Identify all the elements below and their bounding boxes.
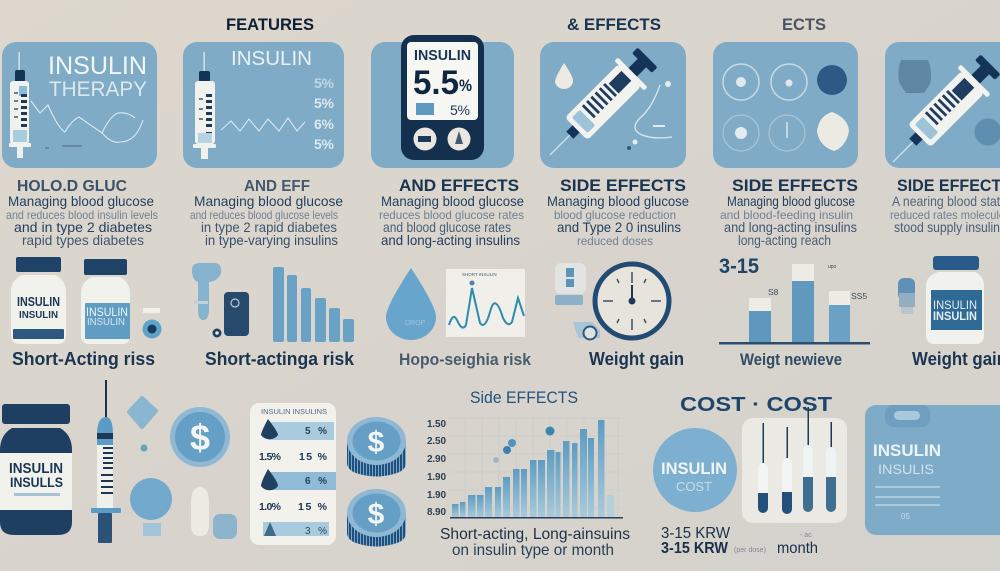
- chart: line card: [446, 269, 525, 337]
- bar: middle: [792, 264, 814, 342]
- icon: dollar coin stack top: [347, 417, 406, 476]
- icon: dollar coin stack top: $: [368, 426, 385, 459]
- text block: column 3: Managing blood glucose: [381, 193, 524, 209]
- text: bottle sublabel: INSULIN: [87, 317, 125, 328]
- text: drop label: DROP: [405, 320, 426, 327]
- axis labels: 2.90: [427, 454, 446, 465]
- icon: dollar coin stack bottom: [347, 489, 406, 546]
- line: wave: [221, 118, 305, 131]
- vial 3: [803, 407, 813, 512]
- label: short-acting risk: Short-actinga risk: [205, 349, 355, 369]
- icon: vertical syringe: [9, 52, 31, 158]
- axis labels: 8.90: [427, 507, 446, 518]
- text: bottle label: INSULIN: [9, 460, 63, 477]
- text block: column 2: Managing blood glucose: [194, 193, 343, 209]
- row: values one: [259, 451, 328, 463]
- text: cost range: (per dose): [734, 547, 766, 554]
- heading: and effects: & EFFECTS: [567, 15, 661, 34]
- row: band two: 6 %: [305, 476, 327, 487]
- text block: column 1: and in type 2 diabetes: [14, 219, 152, 235]
- markers: [493, 426, 554, 463]
- heading: features: FEATURES: [226, 15, 314, 34]
- icon: glucose meter: [401, 35, 484, 160]
- chart: monthly bars: [427, 418, 623, 518]
- panel: syringe with droplet: [535, 42, 686, 170]
- row: band two: [261, 469, 336, 490]
- icon: dollar coin large: [170, 407, 230, 467]
- text: bar annotations: upo: [828, 264, 837, 270]
- chart: weight bars: [719, 255, 870, 344]
- row: band three: [263, 522, 329, 537]
- icon: dark monitor: [212, 292, 249, 338]
- text block: column 2: and reduces blood glucose levels: [190, 208, 338, 222]
- icon: white pill device: [191, 487, 237, 539]
- icon: white patch: [817, 112, 849, 151]
- text block: column 1: rapid types diabetes: [22, 232, 144, 248]
- row: values two: 1.0%: [259, 501, 282, 513]
- line: glucose curve: [31, 101, 143, 142]
- icon: angled syringe: [535, 43, 662, 170]
- text: bottle label: INSULIN: [86, 305, 128, 319]
- text: bar annotations: [768, 264, 867, 301]
- caption: chart: [440, 526, 630, 559]
- icon: blue insulin bottle: [81, 259, 130, 344]
- text block: column 5: SIDE EFFECTS: [732, 176, 858, 195]
- icon: clock: [595, 264, 669, 338]
- text: bottle label: INSULIN: [933, 298, 977, 312]
- title: insulin therapy: [48, 52, 147, 101]
- icon: dark badge: [817, 65, 847, 95]
- icon: blue medical badges: [129, 398, 172, 536]
- marks: small dots: [627, 81, 671, 150]
- icon: droplet: [555, 63, 573, 89]
- text: percentages: 5%: [314, 95, 335, 111]
- row: values one: 1.5%: [259, 451, 282, 463]
- text block: column 2: AND EFF: [244, 178, 310, 195]
- icon: house capsule: [555, 263, 586, 305]
- card: insulin table: [250, 403, 336, 545]
- text block: column 3: and long-acting insulins: [381, 232, 520, 248]
- icon: cart: [573, 322, 600, 340]
- text: cost range: 3-15 KRW: [661, 540, 729, 557]
- icon: flower badge: [974, 118, 1000, 146]
- icon: white insulin bottle: [11, 257, 66, 344]
- text: percentages: [314, 75, 335, 152]
- text block: column 2: in type 2 rapid diabetes: [201, 219, 337, 235]
- row: band one: 5 %: [305, 426, 327, 437]
- heading: side effects: Side EFFECTS: [470, 388, 578, 407]
- text block: column 3: and blood glucose rates: [383, 219, 511, 235]
- icon: pen device: [898, 278, 915, 314]
- text: bottle sublabel: INSULIN: [19, 310, 58, 321]
- badge: insulin cost: [653, 428, 737, 512]
- icon: vertical syringe: [193, 52, 216, 159]
- axis labels: 1.50: [427, 419, 446, 430]
- text: cost range: month: [777, 540, 818, 557]
- label: hypoglycemia risk: Hopo-seighia risk: [399, 350, 532, 369]
- caption: chart: Short-acting, Long-ainsuins: [440, 526, 630, 543]
- text block: column 4: Managing blood glucose: [547, 193, 689, 209]
- text: meter small reading: 5%: [450, 102, 470, 118]
- text: cost range: 3-15 KRW: [661, 525, 731, 542]
- text: bottle sublabel: INSULLS: [10, 474, 63, 490]
- text block: column 4: blood glucose reduction: [554, 208, 676, 222]
- marks: small panel specks: [45, 146, 82, 148]
- vial 2: [782, 427, 792, 514]
- icon: water drop: [386, 268, 436, 340]
- title: insulin: INSULIN: [231, 48, 312, 70]
- heading: faded effects: ECTS: [782, 15, 826, 34]
- text: meter label: INSULIN: [414, 47, 471, 64]
- panel: syringe with badges: [878, 42, 1000, 177]
- text block: column 2: [190, 178, 343, 248]
- row: band one: [261, 419, 334, 440]
- number: 3-15: 3-15: [719, 255, 759, 278]
- text block: column 1: and reduces blood insulin levels: [6, 208, 158, 222]
- caption: chart: on insulin type or month: [452, 542, 614, 559]
- text block: column 2: in type-varying insulins: [205, 232, 338, 248]
- card: insulin pouch: [865, 405, 1000, 535]
- heading: cost: COST · COST: [680, 394, 832, 416]
- chart: descending bars: [273, 267, 354, 342]
- panel: side effect circles: [713, 42, 858, 168]
- text block: column 5: [720, 176, 858, 248]
- icon: bulb device: [192, 263, 221, 320]
- text: percentages: 5%: [314, 136, 335, 152]
- panel: insulin percentages: [183, 42, 344, 168]
- label: short-acting: Short-Acting riss: [12, 349, 155, 369]
- text: cost range: - ac: [800, 532, 812, 539]
- icon: meter chip: [416, 103, 434, 115]
- icon: meter buttons: [414, 128, 470, 150]
- text: pouch footnote: 05: [901, 512, 910, 521]
- text block: column 4: SIDE EFFECTS: [560, 176, 686, 195]
- text block: column 6: [890, 176, 1000, 235]
- icon: dark badge: [898, 60, 931, 93]
- text block: column 3: [379, 176, 524, 248]
- vial 1: [758, 423, 768, 513]
- icon: large vertical syringe: [91, 380, 121, 543]
- text block: column 4: [547, 176, 689, 248]
- text block: column 5: long-acting reach: [738, 232, 831, 248]
- text: cost range: [661, 525, 818, 557]
- icon: large navy insulin bottle: [0, 404, 72, 535]
- axis labels: 1.90: [427, 490, 446, 501]
- axis labels: 1.90: [427, 472, 446, 483]
- text: bottle sublabel: INSULIN: [933, 309, 977, 323]
- text block: column 4: reduced doses: [577, 234, 653, 248]
- badge: insulin cost: COST: [676, 479, 712, 494]
- text: percentages: 5%: [314, 75, 335, 91]
- text block: column 3: AND EFFECTS: [399, 176, 519, 195]
- text block: column 1: HOLO.D GLUC: [17, 178, 127, 195]
- text: meter percent: %: [459, 76, 472, 95]
- text block: column 4: and Type 2 0 insulins: [557, 219, 681, 235]
- text block: column 1: [6, 178, 158, 248]
- label: weight gain: Weight gain: [589, 349, 684, 369]
- text: bar annotations: SS5: [851, 291, 867, 301]
- card: insulin vials: [742, 407, 847, 523]
- text block: column 5: and long-acting insulins: [724, 219, 857, 235]
- text: percentages: 6%: [314, 116, 335, 132]
- row: values two: 15 %: [298, 501, 328, 513]
- text: meter reading: 5.5: [413, 64, 459, 102]
- row: band three: 3 %: [305, 526, 327, 537]
- text block: column 1: Managing blood glucose: [8, 193, 154, 209]
- icon: blue label bottle: [926, 256, 984, 344]
- axis labels: 2.50: [427, 436, 446, 447]
- icon: angled syringe: [878, 50, 1000, 177]
- text: card title: INSULIN INSULINS: [261, 407, 327, 416]
- axis line: [719, 342, 870, 344]
- text block: column 5: Managing blood glucose: [727, 193, 855, 209]
- vial 4: [826, 422, 836, 512]
- icon: ring row two: [723, 115, 805, 151]
- row: values one: 15 %: [299, 451, 328, 463]
- text: bar annotations: S8: [768, 287, 779, 297]
- row: values two: [259, 501, 328, 513]
- icon: dollar coin stack bottom: $: [368, 498, 385, 531]
- bars: [452, 420, 614, 518]
- text block: column 5: and blood-feeding insulin: [720, 208, 853, 222]
- bar: right: [829, 291, 850, 342]
- icon: eye capsule: [142, 308, 162, 338]
- title: insulin therapy: THERAPY: [49, 78, 147, 101]
- text: pouch subtitle: INSULIS: [878, 461, 934, 477]
- panel: glucose meter: [371, 35, 514, 168]
- panel: insulin therapy: [2, 42, 157, 168]
- title: insulin therapy: INSULIN: [48, 52, 147, 80]
- label: weight relieve: Weigt newieve: [740, 350, 842, 369]
- icon: dollar coin large: $: [190, 417, 210, 458]
- badge: insulin cost: INSULIN: [661, 459, 727, 478]
- text: bottle label: INSULIN: [17, 294, 60, 309]
- chart: line card: SHORT INSULIN: [462, 272, 497, 277]
- axis: [450, 517, 623, 518]
- text block: column 3: reduces blood glucose rates: [379, 208, 524, 222]
- text: pouch title: INSULIN: [873, 441, 941, 460]
- axis labels: [427, 419, 446, 518]
- icon: ring row one: [723, 64, 807, 100]
- bar: left: [749, 298, 771, 342]
- line: tubing: [635, 85, 672, 138]
